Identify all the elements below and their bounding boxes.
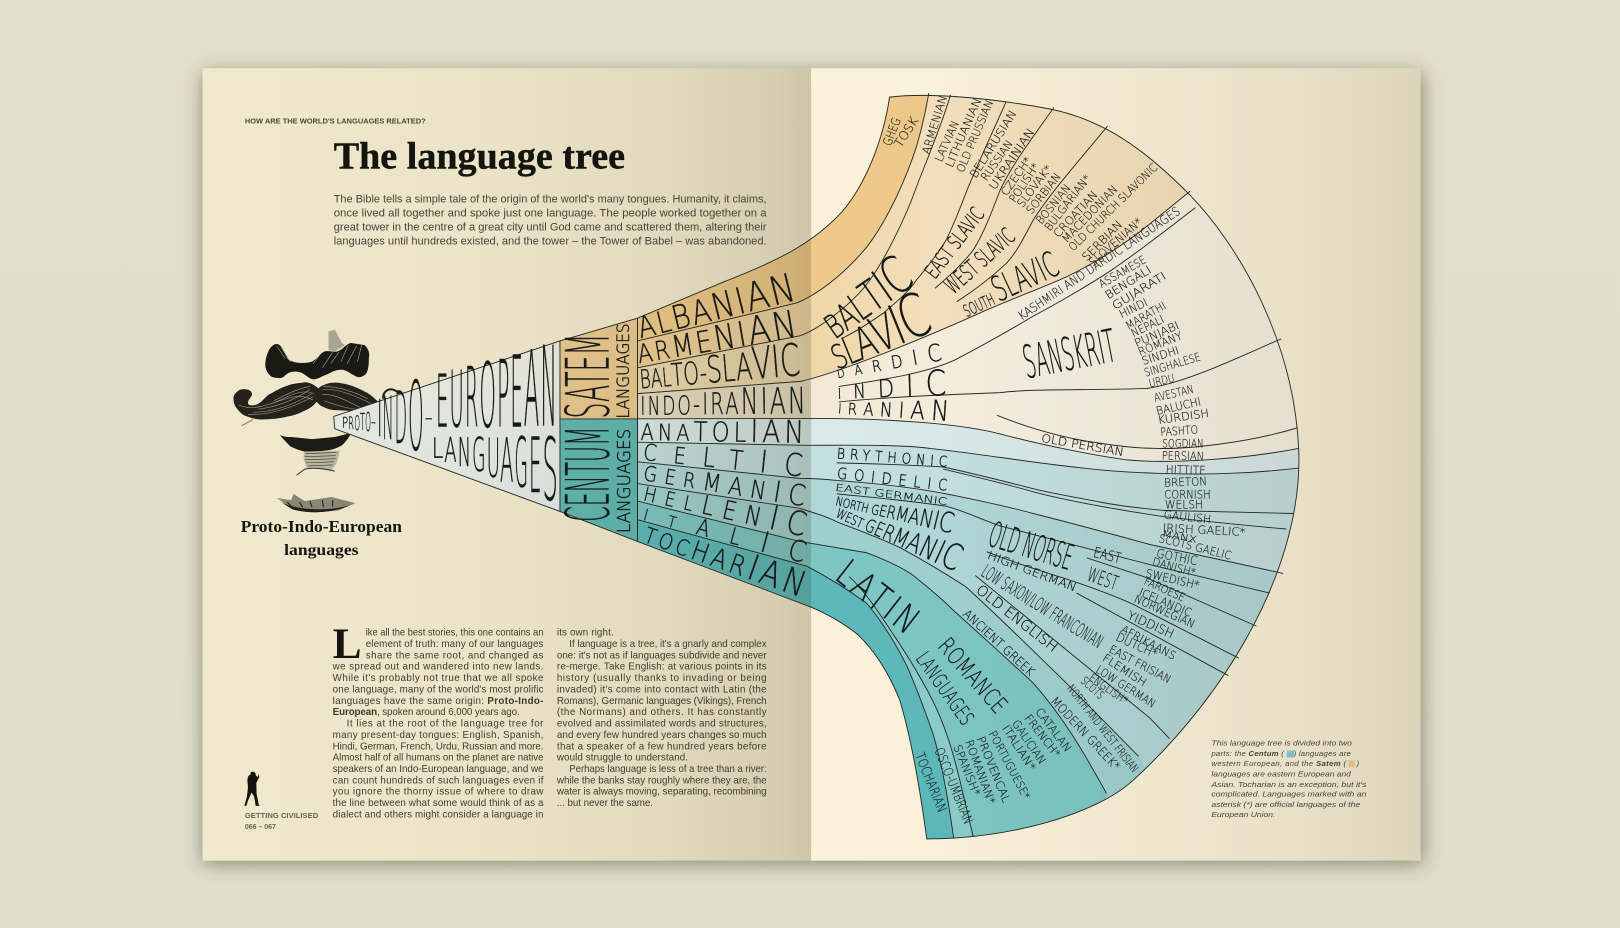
leaf labels: individual languages: BOSNIAN: [1033, 181, 1074, 227]
label: PROTO-INDO-EUROPEAN: O: [408, 362, 424, 472]
side note with legend: parts: the Centum ( ) languages are: [1210, 749, 1352, 758]
leaf labels: individual languages: ICELANDIC: [1137, 585, 1194, 620]
diagram: moustache portrait: [233, 330, 402, 559]
leaf labels: individual languages: AFRIKAANS: [1119, 622, 1178, 663]
label: PROTO-INDO-EUROPEAN: P: [497, 341, 509, 449]
funnel: Centum cell: [554, 419, 637, 541]
label: PROTO-INDO-EUROPEAN: E: [510, 336, 523, 451]
leaf labels: individual languages: FLEMISH: [1100, 651, 1149, 689]
branch labels: second-level groups: EAST GERMANIC: [835, 483, 948, 508]
body text column 2: its own right.: [557, 628, 614, 639]
label: LANGUAGES: N: [458, 431, 471, 476]
leaf labels: individual languages: PERSIAN: [1162, 448, 1204, 463]
label: PROTO-INDO-EUROPEAN: P: [342, 416, 348, 432]
branch labels: second-level groups: BRYTHONIC: [836, 447, 948, 471]
section footer: 066 – 067: [245, 824, 276, 831]
branch labels: second-level groups: SLAVIC: [816, 280, 940, 384]
icon: goatee: [297, 450, 340, 475]
leaf labels: individual languages: OSCO-UMBRIAN: [931, 746, 975, 827]
side note with legend: complicated. Languages marked with an: [1211, 790, 1366, 799]
label: PROTO-INDO-EUROPEAN: O: [354, 412, 360, 435]
body text column 2: If language is a tree, it's a gnarly and complex: [569, 639, 767, 650]
leaf labels: individual languages: PUNJABI: [1132, 318, 1181, 350]
body text column 1: share the same root, and changed as: [366, 650, 544, 661]
intro paragraph: once lived all together and spoke just one language. The people worked together on a: [334, 207, 767, 219]
label: PROTO-INDO-EUROPEAN: I: [377, 389, 382, 448]
branch labels: second-level groups: HIGH GERMAN: [986, 548, 1079, 594]
body text column 2: evolved and assimilated words and structures,: [557, 719, 767, 730]
legend swatch: Centum: [1287, 751, 1294, 757]
leaf labels: individual languages: SINGHALESE: [1143, 350, 1202, 380]
label: PROTO-INDO-EUROPEAN: O: [365, 408, 371, 438]
chart: language tree fan: S: [542, 420, 558, 521]
leaf labels: individual languages: OLD CHURCH SLAVONIC: [1066, 161, 1160, 254]
chart: language tree fan: [333, 92, 1300, 840]
branch labels: first-level family rows: INDO-IRANIAN: [640, 381, 806, 424]
label: PROTO-INDO-EUROPEAN: U: [449, 356, 464, 446]
section footer: [245, 813, 318, 831]
leaf labels: individual languages: BRETON: [1164, 474, 1207, 490]
leaf labels: individual languages: IRISH GAELIC*: [1162, 521, 1246, 539]
title: The language tree: [334, 135, 625, 177]
eyebrow question: HOW ARE THE WORLD'S LANGUAGES RELATED?: [245, 118, 426, 125]
body text column 1: many present-day tongues: English, Spanish,: [333, 730, 543, 741]
leaf labels: individual languages: SPANISH*: [951, 743, 984, 798]
leaf labels: individual languages: CROATIAN: [1050, 188, 1101, 240]
branch labels: second-level groups: I R A NIAN: [837, 389, 950, 429]
body text column 1: European, spoken around 6,000 years ago.: [333, 707, 520, 718]
body text column 1: you ignore the thorny issue of where to draw: [333, 787, 544, 798]
label: PROTO-INDO-EUROPEAN: R: [465, 351, 478, 447]
branch labels: second-level groups: WEST SLAVIC: [940, 224, 1020, 299]
leaf labels: individual languages: CATALAN: [1033, 705, 1075, 755]
leaf labels: individual languages: BALUCHI: [1155, 394, 1202, 418]
label: PROTO-INDO-EUROPEAN: R: [348, 414, 354, 433]
branch labels: second-level groups: D A R D IC: [834, 340, 944, 385]
label: LANGUAGES: L: [432, 432, 443, 465]
side note with legend: European Union.: [1211, 810, 1275, 819]
branch labels: second-level groups: GOIDELIC: [836, 466, 948, 495]
leaf labels: individual languages: EAST FRISIAN: [1107, 642, 1174, 686]
leaf labels: individual languages: ARMENIAN: [919, 93, 950, 156]
branch labels: second-level groups: LATIN: [828, 551, 928, 643]
branch labels: second-level groups: [808, 203, 1125, 730]
leaf labels: individual languages: GAULISH: [1163, 507, 1212, 526]
leaf labels: individual languages: SLOVAK*: [1014, 162, 1055, 210]
body text column 2: invaded) it's come into contact with Latin (the: [557, 684, 767, 695]
body text column 1: speakers of an Indo-European language, and we: [333, 764, 544, 775]
leaf labels: individual languages: LITHUANIAN: [942, 96, 984, 169]
leaf labels: individual languages: YIDDISH: [1125, 607, 1176, 641]
intro paragraph: The Bible tells a simple tale of the origin of the world's many tongues. Humanity, it claims,: [334, 194, 767, 206]
leaf labels: individual languages: SLOVENIAN*: [1086, 215, 1145, 269]
label: PROTO-INDO-EUROPEAN: -: [371, 415, 376, 431]
body text column 1: languages have the same origin: Proto-Indo-: [333, 696, 543, 707]
branch labels: second-level groups: WEST: [1084, 563, 1121, 595]
body text column 1: can count hundreds of such languages even if: [333, 775, 544, 786]
branch labels: first-level family rows: TOCHARIAN: [640, 511, 812, 605]
leaf labels: individual languages: HINDI: [1117, 295, 1150, 321]
funnel: Proto-Indo-European cell: A: [524, 329, 539, 451]
body text column 1: While it's probably not true that we all spoke: [333, 673, 544, 684]
side note with legend: western European, and the Satem ( ): [1211, 759, 1360, 768]
leaf labels: individual languages: FAROESE: [1142, 574, 1187, 604]
leaf labels: individual languages: MACEDONIAN: [1059, 182, 1120, 245]
leaf labels: individual languages: MARATHI: [1123, 299, 1168, 333]
section footer: GETTING CIVILISED: [245, 813, 318, 820]
label: PROTO-INDO-EUROPEAN: E: [436, 361, 448, 445]
leaf labels: individual languages: GUJARATI: [1109, 269, 1169, 313]
label: LANGUAGES: A: [500, 425, 513, 496]
icon: handlebar moustache: [233, 382, 399, 426]
body text column 2: history (usually thanks to invading or being: [557, 673, 767, 684]
caption: Proto-Indo-European languages: languages: [284, 542, 359, 559]
branch labels: second-level groups: OLD ENGLISH: [973, 582, 1061, 656]
branch labels: second-level groups: SOUTH SLAVIC: [953, 244, 1065, 325]
leaf labels: individual languages: KASHMIRI AND DARDIC LANGUAGES: [1015, 203, 1183, 323]
body text column 2: and every few hundred years changes so much: [557, 730, 767, 741]
leaf labels: individual languages: TOSK: [891, 114, 921, 150]
body text column 2: [556, 628, 767, 809]
leaf labels: individual languages: SCOTS GAELIC: [1157, 531, 1233, 563]
leaf labels: individual languages: RUSSIAN: [978, 137, 1016, 183]
chart: language tree fan: SATEM: [554, 334, 624, 418]
leaf labels: individual languages: [879, 93, 1246, 827]
chart: language tree fan: CENTUM: [554, 427, 624, 522]
leaf labels: individual languages: NEPALI: [1129, 312, 1166, 340]
fan bands: [638, 96, 1298, 838]
leaf labels: individual languages: SERBIAN: [1079, 217, 1125, 264]
legend swatch: Satem: [1348, 760, 1355, 767]
leaf labels: individual languages: CZECH*: [998, 154, 1035, 198]
body text column 1: one language, many of the world's most prolific: [333, 684, 544, 695]
side note with legend: Asian. Tocharian is an exception, but it's: [1210, 780, 1367, 789]
funnel: Satem cell: [554, 318, 637, 419]
body text column 2: one: it's not as if languages subdivide and never: [557, 650, 767, 661]
branch labels: second-level groups: EAST: [1092, 545, 1123, 567]
fan outline and branch lines: [560, 93, 1299, 839]
icon: lower lip hair: [280, 433, 351, 452]
branch labels: first-level family rows: ARMENIAN: [633, 303, 800, 373]
side note with legend: [1210, 738, 1367, 819]
intro paragraph: languages until hundreds existed, and the tower – the Tower of Babel – was abandoned.: [334, 235, 767, 247]
body text column 1: ike all the best stories, this one contains an: [366, 628, 543, 639]
leaf labels: individual languages: ITALIAN*: [999, 722, 1039, 774]
leaf labels: individual languages: PROVENCAL: [974, 734, 1013, 804]
label: PROTO-INDO-EUROPEAN: O: [479, 345, 496, 448]
leaf labels: individual languages: MODERN GREEK*: [1048, 693, 1124, 773]
branch labels: second-level groups: LOW SAXON/LOW FRANCONIAN: [977, 561, 1107, 653]
body text column 2: water is always moving, separating, recombining: [556, 787, 767, 798]
leaf labels: individual languages: SCOTS: [1078, 674, 1107, 702]
leaf labels: individual languages: GHEG: [879, 115, 904, 148]
branch labels: second-level groups: LANGUAGES: [911, 647, 979, 730]
branch labels: first-level family rows: ANATOLIAN: [640, 411, 804, 450]
label: PROTO-INDO-EUROPEAN: -: [425, 409, 433, 428]
leaf labels: individual languages: HITTITE: [1166, 462, 1206, 477]
funnel: Centum cell: LANGUAGES: [615, 429, 635, 533]
body text column 2: that a speaker of a few hundred years before: [557, 741, 767, 752]
branch labels: second-level groups: ANCIENT GREEK: [960, 606, 1038, 679]
body text column 2: would struggle to understand.: [556, 753, 688, 764]
side note with legend: languages are eastern European and: [1211, 769, 1352, 778]
branch labels: second-level groups: EAST SLAVIC: [920, 203, 989, 283]
label: LANGUAGES: A: [444, 431, 457, 471]
body text column 1: we spread out and wandered into new lands.: [332, 662, 543, 673]
panel: magazine right page: [811, 68, 1421, 861]
leaf labels: individual languages: LOW GERMAN: [1093, 662, 1158, 711]
caption: Proto-Indo-European languages: Proto-Indo-European: [241, 517, 402, 536]
branch labels: second-level groups: WEST GERMANIC: [831, 486, 969, 580]
leaf labels: individual languages: ASSAMESE: [1096, 253, 1148, 291]
panel: magazine left page: [202, 68, 811, 861]
branch labels: second-level groups: OLD NORSE: [984, 514, 1078, 579]
body text column 1: dialect and others might consider a language in: [333, 809, 543, 820]
leaf labels: individual languages: BENGALI: [1102, 263, 1154, 302]
page shading: right fold: [811, 68, 1421, 861]
chart: language tree fan: N: [540, 324, 557, 453]
body text column 2: re-merge. Take English: at various points in its: [557, 662, 767, 673]
intro paragraph: [334, 194, 767, 247]
leaf labels: individual languages: DANISH*: [1151, 554, 1198, 580]
branch labels: second-level groups: ROMANCE: [932, 632, 1013, 719]
body text column 2: Romans), Germanic languages (Vikings), French: [557, 696, 767, 707]
label: LANGUAGES: U: [487, 426, 500, 489]
intro paragraph: great tower in the centre of a great city until God came and scattered them, altering their: [334, 221, 767, 233]
leaf labels: individual languages: SORBIAN: [1023, 170, 1064, 217]
leaf labels: individual languages: GOTHIC: [1155, 546, 1199, 568]
label: PROTO-INDO-EUROPEAN: [342, 324, 557, 472]
icon: chin tuft: [277, 494, 355, 512]
leaf labels: individual languages: SOGDIAN: [1162, 436, 1204, 450]
label: LANGUAGES: [432, 420, 558, 521]
label: LANGUAGES: G: [472, 428, 486, 482]
branch labels: second-level groups: I N D I C: [837, 363, 947, 407]
branch labels: first-level family rows: HELLENIC: [641, 472, 810, 545]
leaf labels: individual languages: SWEDISH*: [1144, 566, 1201, 592]
body text column 2: Perhaps language is less of a tree than a river:: [569, 764, 767, 775]
branch labels: second-level groups: OLD PERSIAN: [1040, 431, 1125, 459]
leaf labels: individual languages: FRENCH*: [1022, 712, 1064, 760]
body text column 1: the line between what some would think of as a: [333, 798, 544, 809]
body text column 2: while the banks stay roughly where they are, the: [556, 775, 767, 786]
body text column 2: (the Normans) and others. It has constantly: [557, 707, 767, 718]
leaf labels: individual languages: TOCHARIAN: [911, 751, 949, 815]
funnel: Satem cell: LANGUAGES: [614, 323, 633, 418]
label: LANGUAGES: G: [515, 425, 528, 504]
leaf labels: individual languages: GALICIAN: [1009, 717, 1049, 767]
branch labels: first-level family rows: BALTO-SLAVIC: [637, 334, 802, 399]
leaf labels: individual languages: MANX: [1161, 529, 1198, 546]
leaf labels: individual languages: NORTH AND WEST FRISIAN: [1064, 682, 1142, 775]
leaf labels: individual languages: BULGARIAN*: [1041, 172, 1094, 233]
body text column 2: ... but never the same.: [557, 798, 653, 809]
leaf labels: individual languages: ENGLISH*: [1087, 670, 1131, 707]
leaf labels: individual languages: ROMANIAN*: [962, 738, 999, 806]
leaf labels: individual languages: LATVIAN: [932, 119, 962, 164]
branch labels: first-level family rows: CE LT IC: [642, 431, 805, 484]
label: PROTO-INDO-EUROPEAN: T: [360, 410, 365, 436]
body text column 1: [332, 620, 544, 820]
chart: language tree fan: SANSKRIT: [1019, 319, 1120, 389]
icon: upper moustache: [265, 330, 369, 379]
body text column 1: element of truth: many of our languages: [366, 639, 544, 650]
leaf labels: individual languages: WELSH: [1165, 497, 1203, 511]
leaf labels: individual languages: AVESTAN: [1152, 382, 1195, 405]
leaf labels: individual languages: CORNISH: [1164, 487, 1211, 501]
branch labels: second-level groups: NORTH GERMANIC: [833, 480, 958, 540]
body text column 1: Hindi, German, French, Urdu, Russian and more.: [333, 741, 543, 752]
leaf labels: individual languages: KURDISH: [1157, 406, 1210, 427]
leaf labels: individual languages: NORWEGIAN: [1132, 592, 1197, 631]
funnel: Proto-Indo-European cell: [334, 324, 560, 521]
body text column 1: Almost half of all humans on the planet are native: [333, 753, 544, 764]
drop cap: L: [333, 620, 362, 668]
leaf labels: individual languages: POLISH*: [1006, 160, 1042, 205]
side note with legend: This language tree is divided into two: [1211, 738, 1353, 747]
side note with legend: asterisk (*) are official languages of the: [1211, 800, 1361, 809]
branch labels: first-level family rows: GERMANIC: [641, 454, 808, 514]
branch labels: second-level groups: BALTIC: [808, 244, 923, 350]
branch labels: first-level family rows: [632, 264, 812, 605]
leaf labels: individual languages: OLD PRUSSIAN: [953, 98, 996, 174]
branch labels: first-level family rows: ALBANIAN: [632, 264, 800, 348]
leaf labels: individual languages: BELARUSIAN: [967, 107, 1020, 181]
branch labels: first-level family rows: IT AL IC: [641, 495, 810, 570]
label: LANGUAGES: E: [529, 422, 541, 510]
leaf labels: individual languages: DUTCH*: [1114, 629, 1160, 661]
label: PROTO-INDO-EUROPEAN: N: [382, 384, 394, 454]
leaf labels: individual languages: ROMANY: [1136, 328, 1184, 359]
icon: walking figure: [244, 772, 260, 806]
leaf labels: individual languages: PORTUGUESE*: [986, 728, 1034, 802]
leaf labels: individual languages: UKRAINIAN: [986, 125, 1037, 192]
page shading: left gutter: [202, 68, 811, 861]
leaf labels: individual languages: PASHTO: [1160, 422, 1199, 439]
body text column 1: It lies at the root of the language tree for: [347, 719, 544, 730]
leaf labels: individual languages: URDU: [1147, 371, 1176, 390]
caption: Proto-Indo-European languages: [241, 517, 402, 559]
label: PROTO-INDO-EUROPEAN: D: [395, 377, 407, 461]
leaf labels: individual languages: SINDHI: [1140, 343, 1181, 368]
